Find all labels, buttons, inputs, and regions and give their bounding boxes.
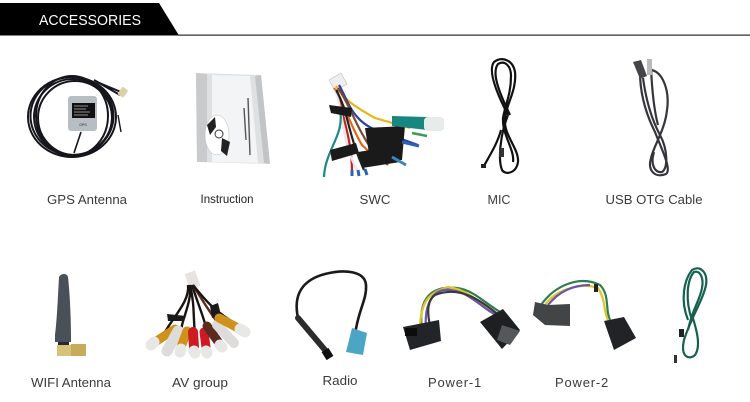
label: Radio: Radio — [322, 374, 358, 388]
label: Power-2: Power-2 — [555, 375, 609, 390]
label: MIC: MIC — [488, 192, 510, 207]
item: GPS antenna — [28, 76, 128, 207]
item: SWC wiring harness — [324, 73, 444, 207]
item: WIFI antenna — [31, 274, 112, 390]
label: WIFI Antenna: WIFI Antenna — [31, 375, 112, 390]
header: accessories: ACCESSORIES — [39, 12, 141, 29]
label: Power-1: Power-1 — [428, 375, 482, 390]
label: Instruction: Instruction — [200, 192, 254, 206]
item: radio cable — [297, 272, 367, 388]
item: instruction manual — [196, 73, 270, 206]
item: AV group — [151, 270, 245, 390]
item: green cable — [674, 268, 706, 363]
label: AV group: AV group — [172, 375, 228, 390]
item: Power-1 harness — [403, 287, 520, 390]
header: accessories — [0, 3, 750, 36]
item: GPS antenna: GPS — [79, 123, 87, 127]
item: USB OTG cable — [606, 59, 702, 207]
label: SWC: SWC — [360, 192, 390, 207]
item: MIC cable — [481, 59, 518, 207]
label: USB OTG Cable: USB OTG Cable — [606, 192, 702, 207]
item: Power-2 harness — [533, 281, 636, 390]
label: GPS Antenna: GPS Antenna — [47, 192, 128, 207]
